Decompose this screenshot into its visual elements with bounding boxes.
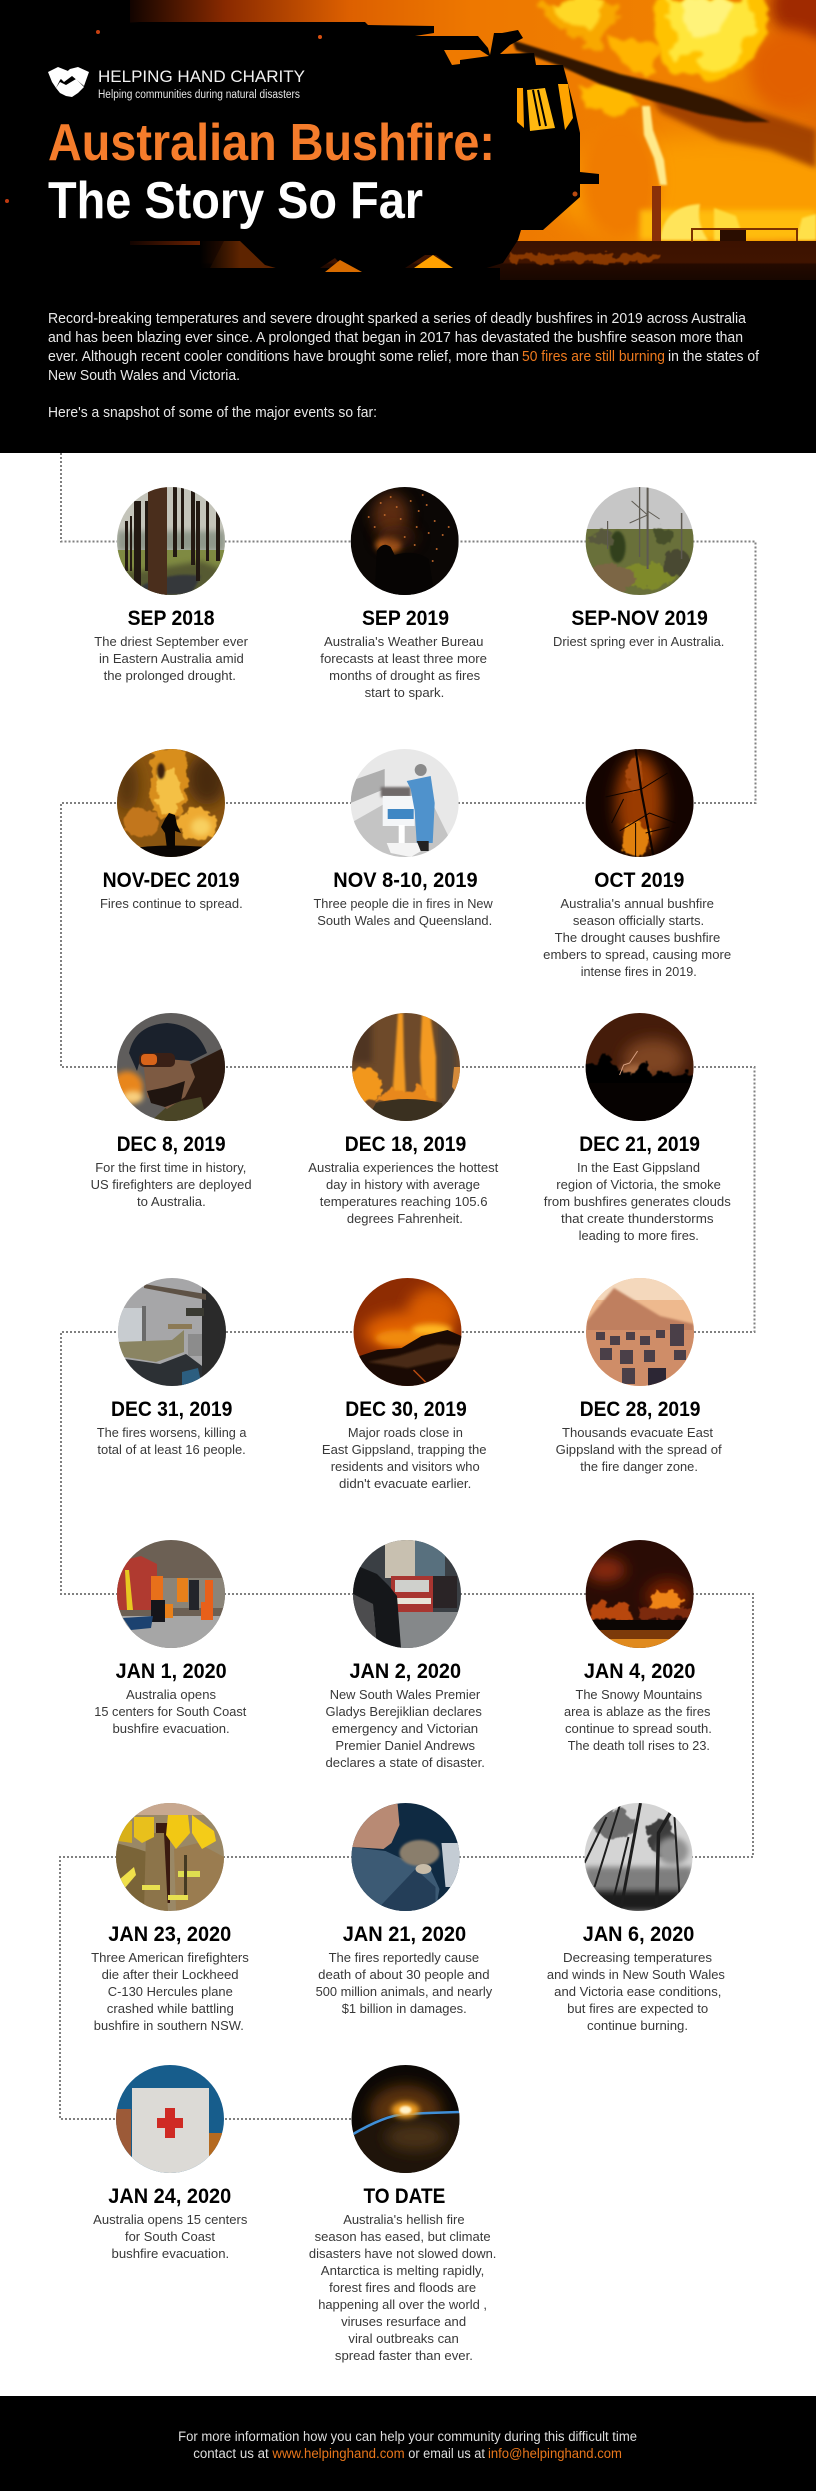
description: Thousands evacuate East — [562, 1425, 713, 1440]
event: DEC 8, 2019 — [91, 1013, 252, 1209]
event: DEC 28, 2019 — [556, 1278, 722, 1474]
description — [326, 1687, 485, 1770]
date heading: SEP 2018 — [128, 607, 215, 630]
description: and Victoria ease conditions, — [554, 1984, 721, 1999]
date heading: JAN 4, 2020 — [584, 1660, 695, 1683]
photo: nurse pushing incubator — [351, 749, 459, 857]
description: but fires are expected to — [567, 2001, 708, 2016]
footer text: For more information how you can help your community during this difficult time — [178, 2429, 637, 2444]
footer text: info@helpinghand.com — [488, 2446, 622, 2461]
description: season officially starts. — [573, 913, 704, 928]
description — [91, 1160, 252, 1209]
intro text block: 50 fires are still burning — [522, 349, 665, 365]
description: New South Wales Premier — [330, 1687, 481, 1702]
date heading: JAN 2, 2020 — [350, 1660, 461, 1683]
description: bushfire evacuation. — [112, 1721, 230, 1736]
description: viruses resurface and — [341, 2314, 466, 2329]
description: Gippsland with the spread of — [556, 1442, 722, 1457]
description: Antarctica is melting rapidly, — [321, 2263, 484, 2278]
description: In the East Gippsland — [577, 1160, 700, 1175]
photo: burning tree trunks — [352, 1013, 460, 1121]
description: months of drought as fires — [329, 668, 481, 683]
description: Australia's Weather Bureau — [324, 634, 483, 649]
description: the prolonged drought. — [104, 668, 236, 683]
date heading: DEC 8, 2019 — [117, 1133, 226, 1156]
description — [322, 1425, 486, 1491]
event: SEP-NOV 2019 — [553, 487, 724, 649]
description: degrees Fahrenheit. — [347, 1211, 463, 1226]
description: from bushfires generates clouds — [544, 1194, 731, 1209]
photo: sunrise over Earth from space — [352, 2065, 460, 2173]
description: total of at least 16 people. — [97, 1442, 246, 1457]
date heading: DEC 30, 2019 — [345, 1398, 467, 1421]
description: day in history with average — [326, 1177, 480, 1192]
icon: red cross — [157, 2108, 183, 2138]
description: to Australia. — [137, 1194, 206, 1209]
panel: footer call to action — [0, 2396, 816, 2491]
event: JAN 24, 2020 — [93, 2065, 248, 2261]
description: viral outbreaks can — [348, 2331, 459, 2346]
photo: glowing burning branches — [586, 749, 694, 857]
description: The fires reportedly cause — [329, 1950, 479, 1965]
event: DEC 30, 2019 — [322, 1278, 486, 1491]
description: Three people die in fires in New — [314, 896, 493, 911]
description: spread faster than ever. — [335, 2348, 473, 2363]
description: The fires worsens, killing a — [97, 1425, 247, 1440]
footer text — [178, 2429, 637, 2461]
description — [564, 1687, 712, 1753]
description: embers to spread, causing more — [543, 947, 731, 962]
photo: firefighter silhouette — [115, 749, 227, 857]
description: Major roads close in — [348, 1425, 463, 1440]
description — [93, 2212, 248, 2261]
description: 500 million animals, and nearly — [316, 1984, 493, 1999]
date heading: NOV-DEC 2019 — [103, 869, 240, 892]
description: didn't evacuate earlier. — [339, 1476, 471, 1491]
footer text: or email us at — [408, 2446, 485, 2461]
description: The drought causes bushfire — [555, 930, 720, 945]
description: East Gippsland, trapping the — [322, 1442, 486, 1457]
photo: fire engine in street — [353, 1540, 461, 1648]
description: season has eased, but climate — [315, 2229, 491, 2244]
description: Driest spring ever in Australia. — [553, 634, 724, 649]
description: bushfire in southern NSW. — [94, 2018, 244, 2033]
event: JAN 1, 2020 — [94, 1540, 247, 1736]
photo: fire behind hillside — [354, 1278, 462, 1386]
description: crashed while battling — [107, 2001, 234, 2016]
description: forest fires and floods are — [329, 2280, 476, 2295]
event: SEP 2019 — [320, 487, 487, 700]
description: region of Victoria, the smoke — [556, 1177, 721, 1192]
description: The driest September ever — [94, 634, 249, 649]
photo: white tent with red cross — [116, 2065, 224, 2173]
date heading: JAN 6, 2020 — [583, 1923, 694, 1946]
event: JAN 21, 2020 — [316, 1803, 493, 2016]
date heading: DEC 31, 2019 — [111, 1398, 232, 1421]
date heading: NOV 8-10, 2019 — [333, 869, 478, 892]
event: OCT 2019 — [543, 749, 731, 979]
event: DEC 21, 2019 — [544, 1013, 731, 1243]
description: For the first time in history, — [95, 1160, 246, 1175]
event: TO DATE — [309, 2065, 496, 2363]
date heading: JAN 23, 2020 — [108, 1923, 231, 1946]
description: continue to spread south. — [565, 1721, 712, 1736]
description: Australia's hellish fire — [343, 2212, 465, 2227]
logo: handshake icon and charity name — [48, 67, 305, 101]
description: Australia opens 15 centers — [93, 2212, 248, 2227]
event: JAN 4, 2020 — [564, 1540, 712, 1753]
description: forecasts at least three more — [320, 651, 487, 666]
description — [556, 1425, 722, 1474]
description: Australia's annual bushfire — [560, 896, 714, 911]
description: area is ablaze as the fires — [564, 1704, 711, 1719]
description: emergency and Victorian — [332, 1721, 478, 1736]
intro text block: in the states of — [668, 349, 760, 365]
charity name: HELPING HAND CHARITY — [98, 67, 305, 86]
description: $1 billion in damages. — [342, 2001, 467, 2016]
description: die after their Lockheed — [102, 1967, 239, 1982]
description: in Eastern Australia amid — [99, 651, 244, 666]
date heading: SEP-NOV 2019 — [571, 607, 708, 630]
description — [94, 634, 249, 683]
description: that create thunderstorms — [561, 1211, 714, 1226]
description — [308, 1160, 499, 1226]
date heading: DEC 18, 2019 — [345, 1133, 466, 1156]
description: The death toll rises to 23. — [568, 1738, 710, 1753]
description — [316, 1950, 493, 2016]
title: The Story So Far — [48, 172, 423, 230]
description: US firefighters are deployed — [91, 1177, 252, 1192]
event: JAN 2, 2020 — [326, 1540, 485, 1770]
description — [547, 1950, 725, 2033]
intro text block — [48, 311, 760, 421]
description: Fires continue to spread. — [100, 896, 243, 911]
date heading: DEC 21, 2019 — [579, 1133, 700, 1156]
description: the fire danger zone. — [580, 1459, 698, 1474]
description: and winds in New South Wales — [547, 1967, 725, 1982]
footer text: www.helpinghand.com — [271, 2446, 405, 2461]
photo: forest fire at night — [586, 1540, 694, 1648]
description: residents and visitors who — [331, 1459, 480, 1474]
title — [48, 114, 495, 230]
description: Australia experiences the hottest — [308, 1160, 499, 1175]
photo: firefighter jackets and helmets — [116, 1803, 224, 1911]
photo: rescuer holding koala — [352, 1803, 460, 1911]
description: start to spark. — [365, 685, 444, 700]
description: Premier Daniel Andrews — [335, 1738, 475, 1753]
description: Gladys Berejiklian declares — [326, 1704, 482, 1719]
photo: paramedics at ambulance — [117, 1540, 225, 1648]
description — [94, 1687, 247, 1736]
photo: firefighter with helmet and sunglasses — [111, 1013, 225, 1121]
intro text block: Record-breaking temperatures and severe drought sparked a series of deadly bushfires in 2019 across Australia — [48, 311, 747, 327]
date heading: JAN 24, 2020 — [108, 2185, 231, 2208]
event: DEC 18, 2019 — [308, 1013, 499, 1226]
event: SEP 2018 — [94, 487, 249, 683]
photo: burnt forest — [117, 487, 225, 595]
photo: misty charred tree trunks — [584, 1803, 692, 1911]
description: happening all over the world , — [318, 2297, 487, 2312]
description: C-130 Hercules plane — [108, 1984, 233, 1999]
event: JAN 6, 2020 — [547, 1803, 725, 2033]
description — [314, 896, 493, 928]
event: JAN 23, 2020 — [91, 1803, 249, 2033]
photo: lightning over dark trees — [586, 1013, 694, 1121]
footer text: contact us at — [193, 2446, 269, 2461]
event: NOV 8-10, 2019 — [314, 749, 493, 928]
description: for South Coast — [125, 2229, 215, 2244]
description: Australia opens — [126, 1687, 216, 1702]
description: temperatures reaching 105.6 — [320, 1194, 488, 1209]
photo: traffic jam at dusk — [586, 1278, 694, 1386]
description: disasters have not slowed down. — [309, 2246, 496, 2261]
description — [97, 1425, 247, 1457]
description: The Snowy Mountains — [576, 1687, 703, 1702]
description: South Wales and Queensland. — [317, 913, 492, 928]
description — [91, 1950, 249, 2033]
date heading: JAN 1, 2020 — [116, 1660, 227, 1683]
photo: hospital bed — [118, 1278, 226, 1386]
date heading: OCT 2019 — [594, 869, 684, 892]
description: leading to more fires. — [579, 1228, 699, 1243]
dotted timeline connector — [60, 453, 756, 2119]
description — [309, 2212, 496, 2363]
icon: handshake — [48, 67, 89, 97]
description: death of about 30 people and — [318, 1967, 490, 1982]
description: continue burning. — [587, 2018, 688, 2033]
photo: dead trees in green scrub — [586, 487, 694, 595]
tagline: Helping communities during natural disasters — [98, 89, 300, 101]
intro text block: and has been blazing ever since. A prolonged that began in 2017 has devastated the bushfire season more than — [48, 330, 743, 346]
description: Three American firefighters — [91, 1950, 249, 1965]
description — [320, 634, 487, 700]
title: Australian Bushfire: — [48, 114, 495, 172]
event: DEC 31, 2019 — [97, 1278, 247, 1457]
intro text block: New South Wales and Victoria. — [48, 368, 240, 384]
description: declares a state of disaster. — [326, 1755, 485, 1770]
photo: sparks in the dark — [351, 487, 459, 595]
date heading: TO DATE — [364, 2185, 445, 2208]
intro text block: Here's a snapshot of some of the major events so far: — [48, 405, 377, 421]
photo: fire truck silhouette against blaze — [0, 0, 816, 280]
description: 15 centers for South Coast — [94, 1704, 247, 1719]
date heading: DEC 28, 2019 — [580, 1398, 700, 1421]
event: NOV-DEC 2019 — [100, 749, 243, 911]
description: Decreasing temperatures — [563, 1950, 712, 1965]
description: bushfire evacuation. — [112, 2246, 229, 2261]
description — [543, 896, 731, 979]
description — [544, 1160, 731, 1243]
description: intense fires in 2019. — [581, 964, 697, 979]
date heading: SEP 2019 — [362, 607, 449, 630]
panel: header with fire truck photo and intro — [0, 0, 816, 453]
date heading: JAN 21, 2020 — [343, 1923, 466, 1946]
intro text block: ever. Although recent cooler conditions have brought some relief, more than — [48, 349, 519, 365]
